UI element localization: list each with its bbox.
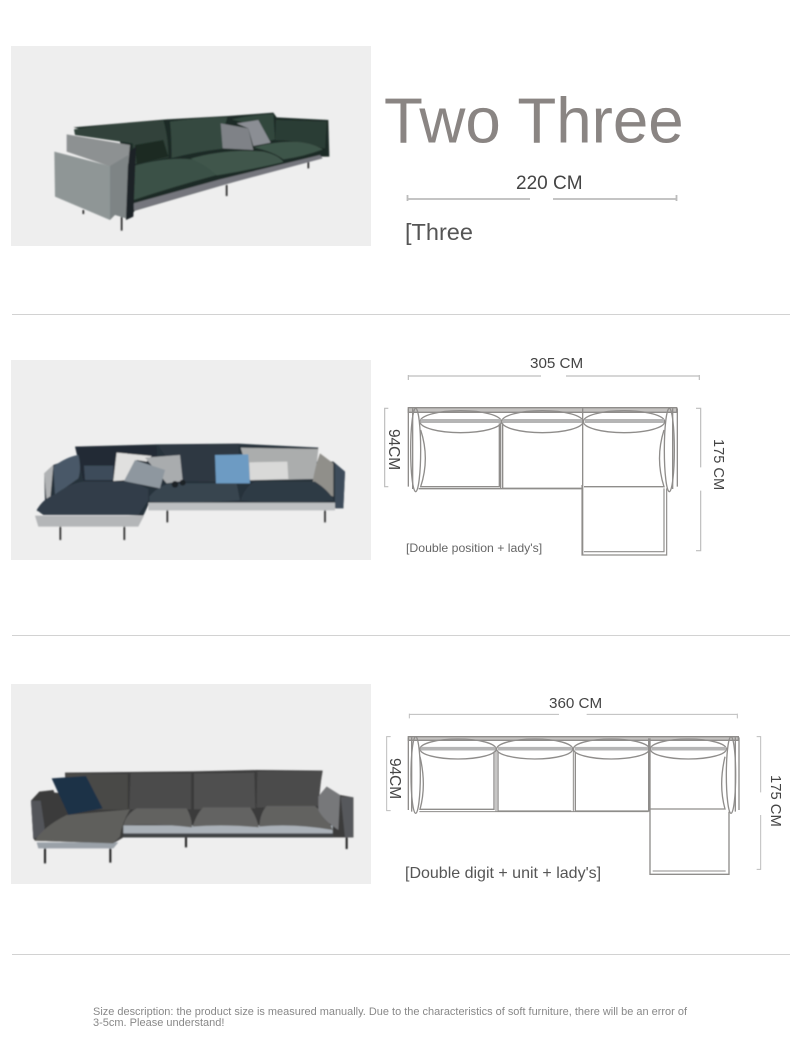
plan drawing: double digit + unit + chaise bbox=[387, 714, 761, 874]
label: 94CM: 94CM bbox=[385, 429, 402, 470]
label: 94CM: 94CM bbox=[386, 758, 403, 799]
photo: green sofa with grey arm bbox=[54, 113, 329, 231]
footnote: size description: 3-5cm. Please understand! bbox=[93, 1017, 224, 1029]
width dimension line bbox=[407, 195, 677, 201]
dimension lines bbox=[385, 375, 701, 551]
label: 175 CM: 175 CM bbox=[710, 439, 726, 490]
label: 360 CM: 360 CM bbox=[549, 695, 602, 712]
footnote: size description bbox=[93, 1006, 688, 1029]
photo: grey sofa with navy pillow bbox=[31, 770, 353, 863]
sofa outline bbox=[408, 737, 739, 874]
panel: double digit with unit and chaise photo bbox=[11, 684, 371, 884]
caption: double position + lady's: [Double position + lady's] bbox=[406, 541, 542, 555]
caption: double digit + unit + lady's: [Double digit + unit + lady's] bbox=[405, 865, 601, 882]
panel: double position with chaise photo bbox=[11, 360, 371, 560]
footnote: size description: Size description: the product size is measured manually. Due to the characteristics of soft furniture, there will be an error of bbox=[93, 1006, 688, 1018]
photo: blue sofa with chaise bbox=[35, 444, 345, 540]
caption: three-seat: [Three bbox=[405, 219, 473, 245]
label: 175 CM: 175 CM bbox=[767, 775, 783, 827]
divider lines bbox=[12, 314, 790, 954]
plan drawing: double position + chaise bbox=[385, 375, 701, 555]
label: 305 CM: 305 CM bbox=[530, 355, 583, 372]
title: Two Three bbox=[384, 86, 684, 156]
panel: three-seat sofa photo bbox=[11, 46, 371, 246]
sofa outline bbox=[408, 408, 677, 555]
width label: 220 CM: 220 CM bbox=[516, 173, 583, 194]
dimension lines bbox=[387, 714, 761, 869]
